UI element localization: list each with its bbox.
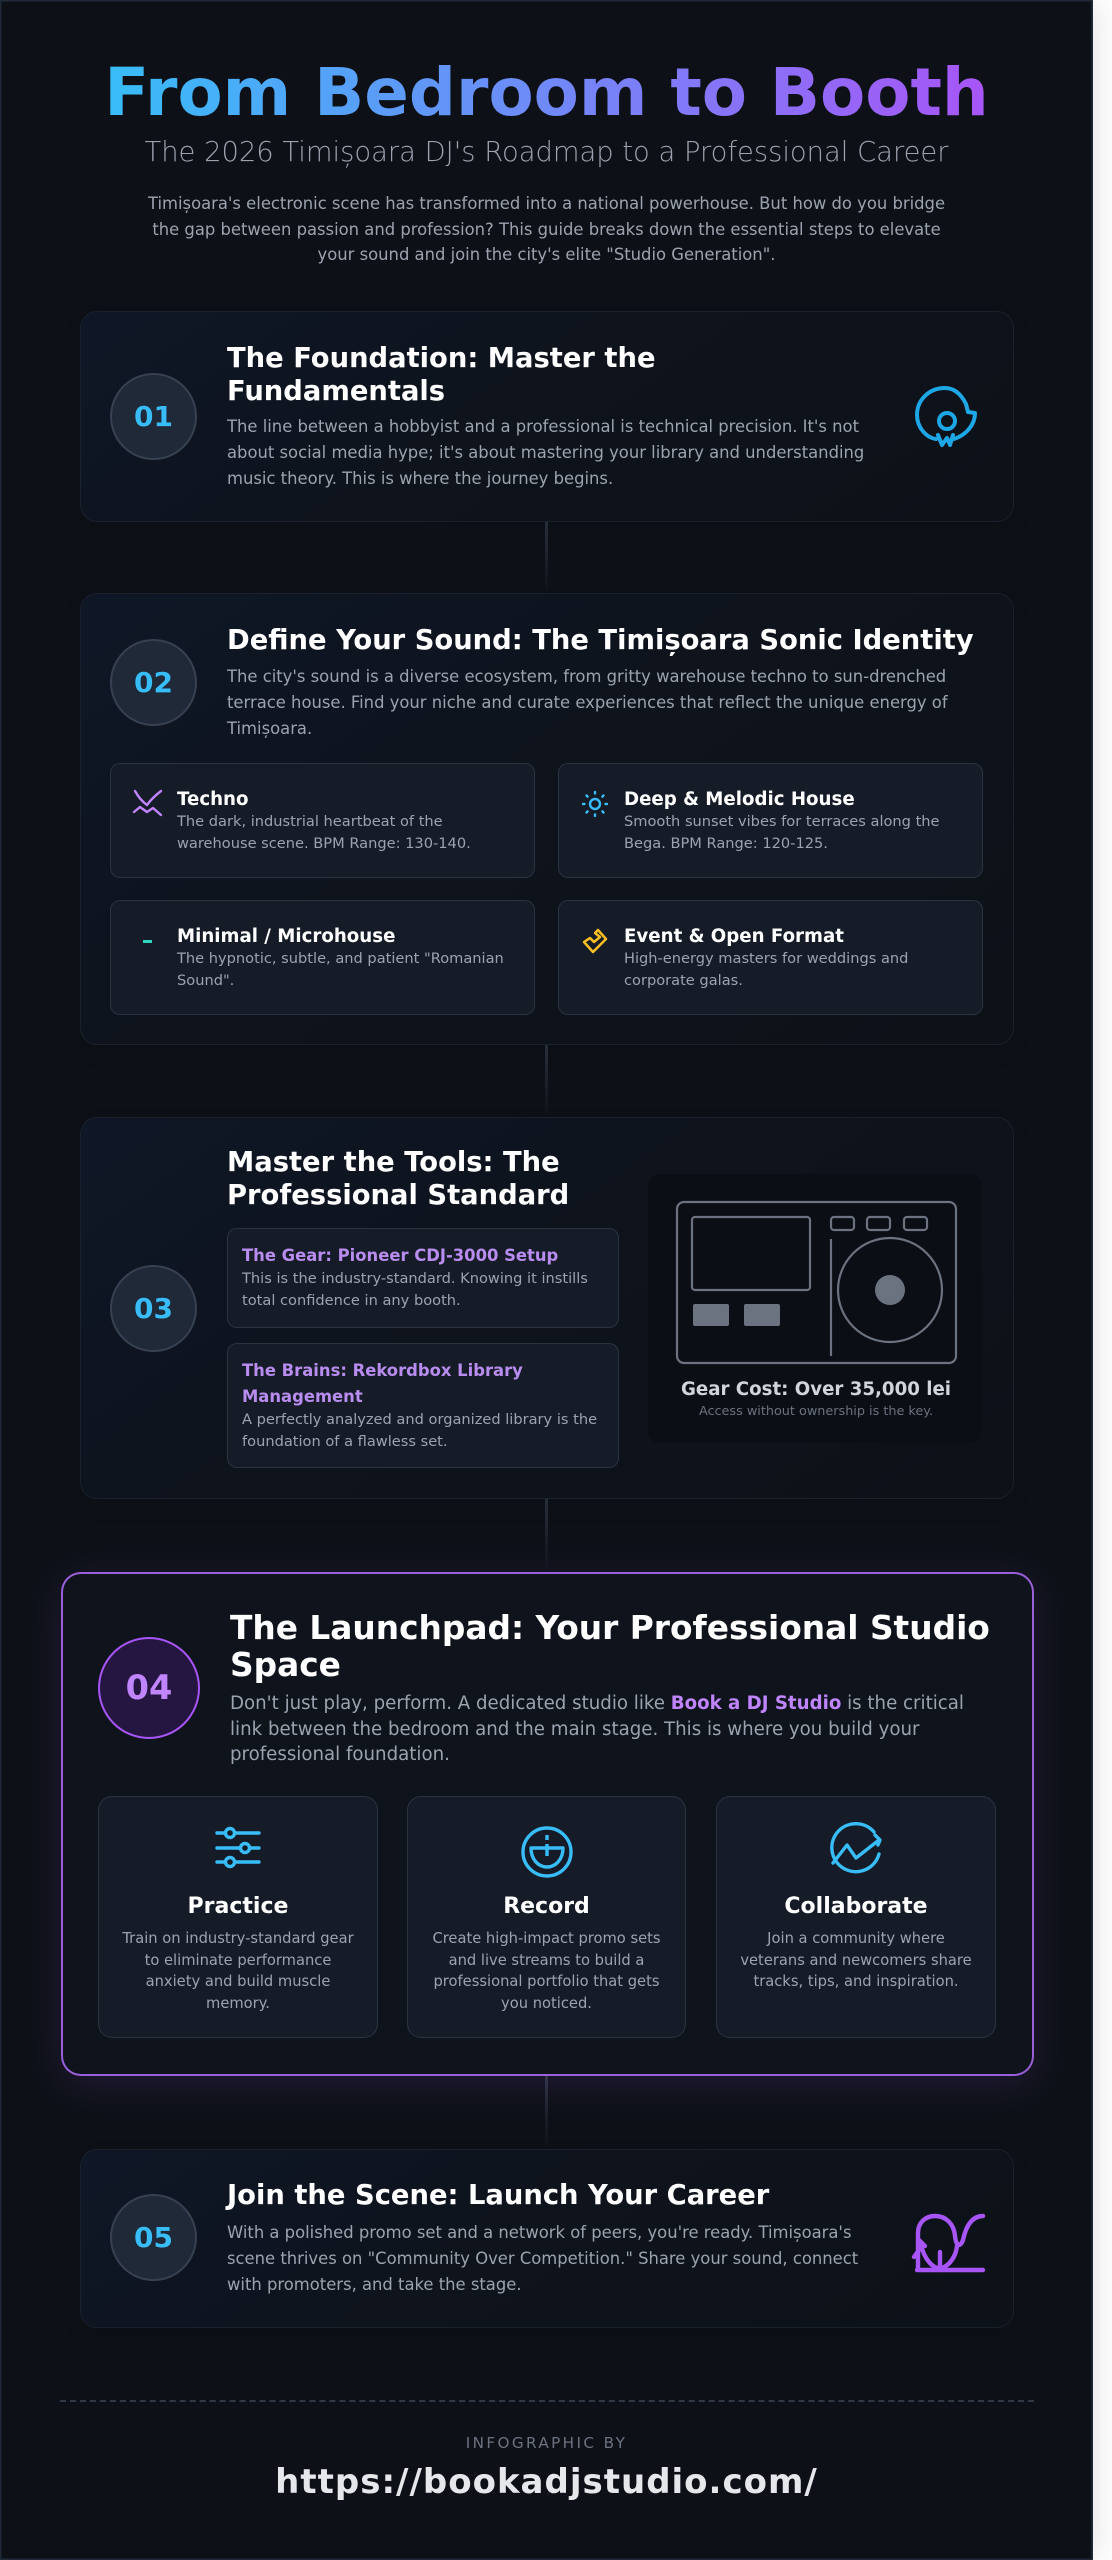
intro text: the gap between passion and profession? This guide breaks down the essential steps to elevate [152, 220, 941, 239]
text: practice: memory. [206, 1995, 270, 2012]
heading: launchpad [230, 1609, 990, 1684]
text: gear: This is the industry-standard. Knowing it instills [242, 1270, 588, 1287]
icon: techno [132, 790, 162, 816]
panel: step 5 scene [81, 2150, 1013, 2327]
text: gear [242, 1270, 588, 1309]
text: deep house: Bega. BPM Range: 120-125. [624, 835, 828, 852]
label: gear: The Gear: Pioneer CDJ-3000 Setup [242, 1246, 558, 1265]
text: event: corporate galas. [624, 972, 743, 989]
text: record: and live streams to build a [449, 1952, 644, 1969]
divider [60, 2400, 1034, 2402]
text: foundation description: about social media hype; it's about mastering your library and understanding [227, 443, 864, 462]
icon: record [521, 1826, 573, 1878]
step number 05 [110, 2194, 197, 2281]
step number 04 [98, 1637, 200, 1739]
card: event [558, 900, 983, 1015]
panel: gear cost [648, 1174, 982, 1443]
text: techno: The dark, industrial heartbeat of the [177, 813, 443, 830]
heading: tools: Master the Tools: The [227, 1147, 560, 1178]
text: event: High-energy masters for weddings and [624, 950, 908, 967]
text: collaborate: Join a community where [767, 1930, 945, 1947]
connector 4 to 5 [545, 2076, 548, 2150]
subtitle: The 2026 Timișoara DJ's Roadmap to a Professional Career [144, 137, 949, 168]
intro text [148, 194, 945, 264]
text: record: professional portfolio that gets [433, 1973, 660, 1990]
panel: step 2 sound [81, 594, 1013, 1044]
icon: turntable head [915, 386, 977, 448]
text: sound description [226, 667, 948, 738]
text: collaborate: veterans and newcomers share [740, 1952, 972, 1969]
card: collaborate [716, 1796, 996, 2038]
step number 04: 04 [126, 1668, 172, 1707]
step number 02: 02 [134, 666, 173, 699]
text: minimal [176, 950, 504, 989]
text: practice [122, 1930, 354, 2012]
text: deep house [624, 813, 940, 852]
label: event: Event & Open Format [624, 926, 844, 947]
icon: sun [582, 790, 608, 818]
label: practice: Practice [188, 1894, 288, 1919]
heading: tools [227, 1147, 569, 1211]
label: techno: Techno [177, 789, 248, 810]
heading: launchpad: The Launchpad: Your Professional Studio [230, 1609, 990, 1647]
text: deep house: Smooth sunset vibes for terraces along the [624, 813, 940, 830]
intro text: Timișoara's electronic scene has transformed into a national powerhouse. But how do you bridge [148, 194, 945, 213]
label: record: Record [503, 1894, 590, 1919]
step number 01: 01 [134, 400, 173, 433]
text: event [624, 950, 908, 989]
text: launchpad description: professional foundation. [230, 1744, 450, 1765]
text: foundation description [226, 417, 864, 488]
heading: foundation: The Foundation: Master the [227, 343, 656, 374]
text: launchpad description: Don't just play, perform. A dedicated studio like Book a DJ Studio is the critical [230, 1693, 964, 1714]
step number 01 [110, 373, 197, 460]
heading: sound: Define Your Sound: The Timișoara Sonic Identity [227, 625, 974, 656]
icon: sliders [215, 1826, 261, 1868]
panel: step 1 foundation [81, 312, 1013, 521]
card: techno [110, 763, 535, 878]
footer url: https://bookadjstudio.com/ [275, 2462, 818, 2502]
text: brains: A perfectly analyzed and organized library is the [242, 1411, 597, 1428]
label: brains: Management [242, 1387, 363, 1406]
text: practice: anxiety and build muscle [146, 1973, 330, 1990]
text: access note: Access without ownership is the key. [699, 1404, 933, 1419]
label: brains [242, 1361, 523, 1406]
text: collaborate [740, 1930, 972, 1990]
text: foundation description: music theory. This is where the journey begins. [227, 469, 613, 488]
heading: launchpad: Space [230, 1646, 341, 1684]
text: brains [242, 1411, 597, 1450]
connector 1 to 2 [545, 521, 548, 594]
card: minimal [110, 900, 535, 1015]
text: scene description: with promoters, and take the stage. [227, 2275, 522, 2294]
text: minimal: The hypnotic, subtle, and patient "Romanian [177, 950, 504, 967]
text: sound description: Timișoara. [227, 719, 312, 738]
panel: step 3 tools [81, 1118, 1013, 1498]
text: scene description: With a polished promo set and a network of peers, you're ready. Timișoara's [227, 2223, 851, 2242]
text: practice: to eliminate performance [145, 1952, 331, 1969]
step number 03: 03 [134, 1292, 173, 1325]
text: brains: foundation of a flawless set. [242, 1433, 448, 1450]
label: gear cost: Gear Cost: Over 35,000 lei [681, 1379, 951, 1400]
icon: stage waveform [912, 2214, 986, 2272]
card: deep house [558, 763, 983, 878]
footer label: INFOGRAPHIC BY [466, 2434, 627, 2452]
card: brains [227, 1343, 619, 1468]
connector 3 to 4 [545, 1498, 548, 1572]
heading: scene: Join the Scene: Launch Your Career [227, 2180, 769, 2211]
label: brains: The Brains: Rekordbox Library [242, 1361, 523, 1380]
icon: event [582, 928, 608, 954]
text: foundation description: The line between a hobbyist and a professional is technical precision. It's not [227, 417, 859, 436]
text: scene description [227, 2223, 858, 2294]
text: scene description: scene thrives on "Community Over Competition." Share your sound, connect [227, 2249, 858, 2268]
text: gear: total confidence in any booth. [242, 1292, 461, 1309]
text: collaborate: tracks, tips, and inspiration. [753, 1973, 959, 1990]
step number 02 [110, 639, 197, 726]
connector 2 to 3 [545, 1044, 548, 1118]
step number 03 [110, 1265, 197, 1352]
label: minimal: Minimal / Microhouse [177, 926, 395, 947]
text: record [432, 1930, 661, 2012]
icon: collaborate [830, 1822, 882, 1874]
text: sound description: terrace house. Find your niche and curate experiences that reflect the unique energy of [227, 693, 948, 712]
icon: dash [143, 940, 152, 943]
label: deep house: Deep & Melodic House [624, 789, 855, 810]
text: sound description: The city's sound is a diverse ecosystem, from gritty warehouse techno to sun-drenched [227, 667, 946, 686]
icon: CDJ device [676, 1200, 958, 1364]
title: From Bedroom to Booth [104, 54, 989, 131]
heading: foundation: Fundamentals [227, 376, 445, 407]
step number 05: 05 [134, 2221, 173, 2254]
panel: step 4 launchpad [61, 1572, 1034, 2076]
text: record: Create high-impact promo sets [432, 1930, 661, 1947]
text: minimal: Sound". [177, 972, 234, 989]
intro text: your sound and join the city's elite "Studio Generation". [318, 245, 775, 264]
heading: tools: Professional Standard [227, 1180, 569, 1211]
heading: foundation [227, 343, 656, 407]
card: gear [227, 1228, 619, 1328]
card: record [407, 1796, 686, 2038]
text: launchpad description: link between the bedroom and the main stage. This is where you build your [230, 1719, 920, 1740]
text: techno: warehouse scene. BPM Range: 130-140. [177, 835, 471, 852]
label: collaborate: Collaborate [784, 1894, 928, 1919]
text: record: you noticed. [501, 1995, 592, 2012]
text: techno [176, 813, 471, 852]
text: practice: Train on industry-standard gear [122, 1930, 354, 1947]
text: launchpad description [230, 1693, 964, 1765]
card: practice [98, 1796, 378, 2038]
